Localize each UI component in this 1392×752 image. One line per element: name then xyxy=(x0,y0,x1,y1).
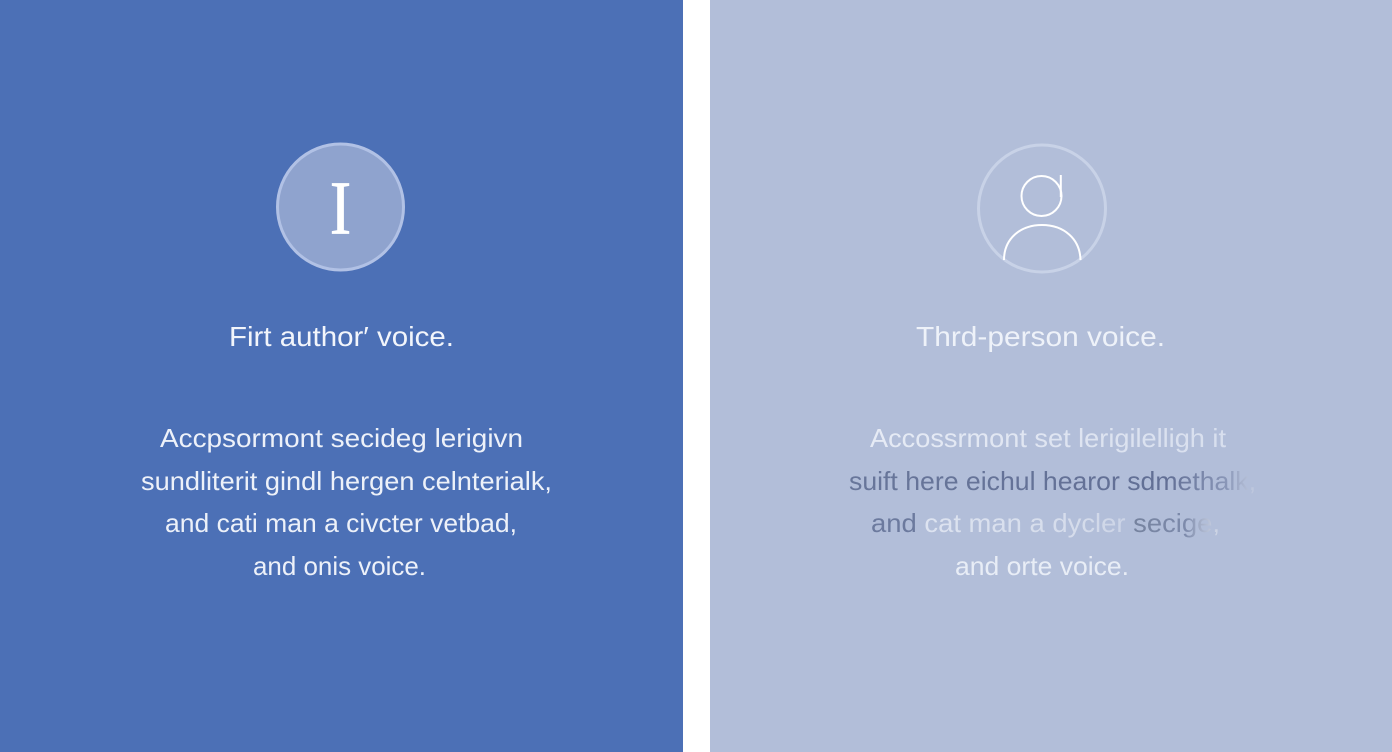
panel background: blue xyxy=(0,0,683,752)
panel: first author's voice xyxy=(0,0,683,752)
body text: third-person voice: and cat man a dycler secige, xyxy=(871,508,1220,538)
body text: third-person voice: Accossrmont set lerigilelligh it xyxy=(870,423,1227,453)
icon: letter I in circle: I xyxy=(330,166,351,251)
panel background: pale blue xyxy=(710,0,1392,752)
body text: first author's voice: and onis voice. xyxy=(253,551,426,581)
panel: third-person voice xyxy=(710,0,1392,752)
body text: third-person voice: and orte voice. xyxy=(955,551,1129,581)
body text: first author's voice: sundliterit gindl hergen celnterialk, xyxy=(141,466,552,496)
heading: third-person voice: Thrd-person voice. xyxy=(916,321,1165,352)
body text: first author's voice xyxy=(141,423,552,581)
body text: third-person voice xyxy=(849,423,1256,581)
body text: third-person voice: suift here eichul hearor sdmethalk, xyxy=(849,466,1256,496)
heading: first author's voice: Firt author′ voice. xyxy=(229,321,454,352)
icon: person outline in circle xyxy=(978,145,1106,272)
icon: letter I in circle xyxy=(278,144,404,270)
body text: first author's voice: Accpsormont secideg lerigivn xyxy=(160,423,523,453)
body text: first author's voice: and cati man a civcter vetbad, xyxy=(165,508,517,538)
